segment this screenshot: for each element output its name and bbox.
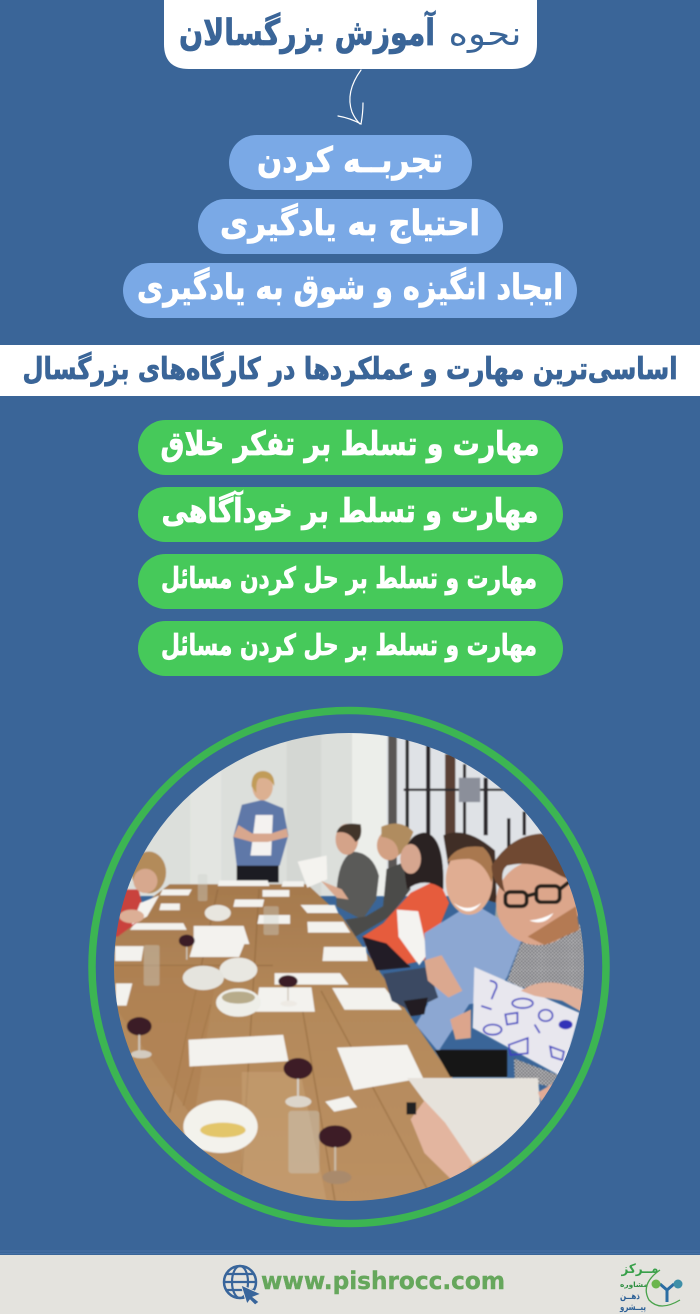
green pill: problem solving: [138, 554, 563, 609]
title: bold words: آموزش بزرگسالان: [179, 10, 436, 54]
wine glasses: [127, 935, 352, 1184]
table top: [114, 883, 494, 1201]
website address: www.pishrocc.com: [261, 1267, 505, 1295]
pill: experience: تجربــه کردن: [257, 141, 443, 181]
green pill: problem solving: مهارت و تسلط بر حل کردن مسائل: [161, 561, 537, 595]
seated row of people on the right: [298, 824, 516, 970]
photo: workshop around a table: [101, 727, 593, 1214]
man in blue shirt: [383, 847, 524, 1077]
wood plank lines: [114, 889, 428, 1200]
bowls: [183, 905, 261, 1153]
standing facilitator: [233, 771, 288, 883]
green pill: problem solving repeat: مهارت و تسلط بر حل کردن مسائل: [161, 628, 537, 662]
green pill: creative thinking: مهارت و تسلط بر تفکر خلاق: [160, 424, 540, 464]
lighter plank: [242, 1072, 328, 1207]
papers on far table: [115, 881, 423, 1112]
green pill: self awareness: مهارت و تسلط بر خودآگاهی: [162, 490, 538, 531]
logo text: ذهــن: [620, 1292, 640, 1302]
man with glasses: [492, 834, 590, 1087]
logo text: مــرکز: [621, 1262, 658, 1277]
logo text: مشاوره: [620, 1281, 648, 1289]
foreground paper and hand: [406, 1078, 555, 1183]
green pill: problem solving repeat: [138, 621, 563, 676]
title: first word: نحوه: [448, 14, 522, 53]
title panel: [164, 0, 537, 69]
drawing paper held up: [450, 967, 583, 1077]
logo text: [619, 1262, 658, 1313]
dark table edge shading: [172, 1068, 198, 1110]
pill: need to learn: [198, 199, 503, 254]
water glasses: [144, 874, 319, 1173]
wall with curtains: [127, 733, 388, 898]
pill: need to learn: احتیاج به یادگیری: [220, 203, 480, 244]
footer stripes: [0, 1251, 700, 1254]
logo emblem: [646, 1270, 682, 1306]
windows: [386, 736, 544, 898]
icon: globe with cursor: [224, 1266, 261, 1305]
left seated woman: [116, 850, 167, 938]
green pill: creative thinking: [138, 420, 563, 475]
pill: motivation: [123, 263, 577, 318]
green pill: self awareness: [138, 487, 563, 542]
arrow: [338, 70, 363, 124]
pill: motivation: ایجاد انگیزه و شوق به یادگیری: [137, 267, 563, 308]
logo: [619, 1262, 682, 1313]
footer bar: [0, 1255, 700, 1314]
logo text: پیــشرو: [619, 1303, 646, 1313]
photo ring: [92, 710, 606, 1224]
section heading band: [0, 345, 700, 396]
pill: experience: [229, 135, 472, 190]
